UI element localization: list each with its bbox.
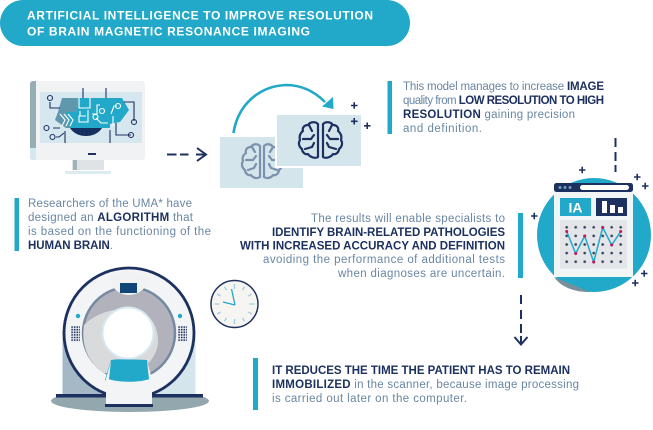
text block: algorithm: HUMAN BRAIN. <box>28 240 113 252</box>
decorative plus signs <box>351 102 648 286</box>
text block: algorithm: Researchers of the UMA* have <box>28 198 192 210</box>
bar icon <box>596 198 627 216</box>
text block: reduced time <box>253 358 579 410</box>
text block: image quality: RESOLUTION gaining precision <box>403 109 575 121</box>
arrow: dashed arrow to images <box>167 148 206 161</box>
icon: MRI scanner <box>51 268 209 412</box>
text block: results: The results will enable specialists to <box>311 213 505 225</box>
text block: results: avoiding the performance of additional tests <box>263 254 505 266</box>
title banner <box>0 0 410 46</box>
text block: results: WITH INCREASED ACCURACY AND DEFINITION <box>240 240 505 252</box>
text block: results <box>240 213 523 280</box>
text block: reduced time: IMMOBILIZED in the scanner, because image processing <box>272 379 579 391</box>
icon: computer monitor with circuit brain <box>30 81 145 174</box>
icon: IA chart window <box>537 178 651 292</box>
text block: image quality: This model manages to increase IMAGE <box>403 81 604 93</box>
title banner: OF BRAIN MAGNETIC RESONANCE IMAGING <box>27 24 310 38</box>
text block: image quality: quality from LOW RESOLUTION TO HIGH <box>403 95 604 107</box>
text block: results: IDENTIFY BRAIN-RELATED PATHOLOGIES <box>272 227 505 239</box>
title banner: ARTIFICIAL INTELLIGENCE TO IMPROVE RESOLUTION <box>27 8 373 22</box>
arrow: curved arrow <box>234 85 334 133</box>
IA label: IA <box>568 200 582 216</box>
text block: algorithm <box>14 198 211 252</box>
text block: image quality: and definition. <box>403 123 482 135</box>
arrow: dashed line into chart <box>614 138 616 172</box>
text block: image quality <box>388 81 604 135</box>
low resolution image <box>220 137 303 188</box>
text block: reduced time: IT REDUCES THE TIME THE PATIENT HAS TO REMAIN <box>272 365 570 377</box>
text block: results: when diagnoses are uncertain. <box>337 268 505 280</box>
line chart <box>560 220 627 268</box>
text block: algorithm: is based on the functioning of the <box>28 226 211 238</box>
arrow: dashed arrow down <box>514 295 528 344</box>
high resolution image <box>275 113 363 168</box>
icon: low to high resolution brain images <box>220 85 363 188</box>
text block: algorithm: designed an ALGORITHM that <box>28 212 194 224</box>
text block: reduced time: is carried out later on the computer. <box>272 393 467 405</box>
icon: clock <box>211 280 258 328</box>
